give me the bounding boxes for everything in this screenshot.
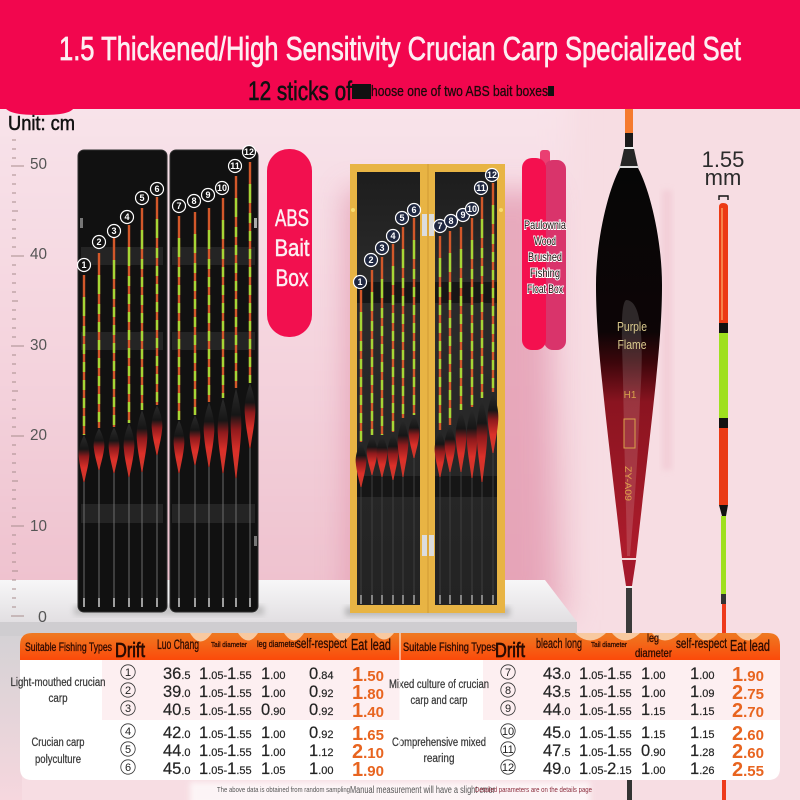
category labels: Mixed culture of crucian bbox=[389, 679, 489, 691]
row 2: 1.00 bbox=[261, 683, 285, 701]
row 1: 1 bbox=[125, 667, 131, 679]
category labels: polyculture bbox=[35, 754, 81, 766]
row 4: 4 bbox=[125, 726, 131, 738]
ruler: 30 bbox=[30, 337, 47, 354]
table header band: self-respect bbox=[676, 635, 727, 651]
row 10: 2.60 bbox=[732, 723, 764, 745]
float B4 bbox=[386, 230, 400, 604]
row 1 bbox=[121, 664, 384, 686]
float A10 bbox=[216, 182, 228, 607]
float A1 bbox=[78, 258, 90, 607]
wall shadow behind float bbox=[662, 190, 672, 470]
float A1: 1 bbox=[81, 260, 87, 270]
row 5: 1.00 bbox=[261, 742, 285, 760]
float B12: 12 bbox=[487, 170, 497, 180]
row 3: 0.92 bbox=[309, 701, 333, 719]
float A3: 3 bbox=[111, 226, 117, 236]
float label: Purple Flame bbox=[617, 319, 647, 352]
row 4: 42.0 bbox=[163, 724, 191, 742]
row 1: 36.5 bbox=[163, 665, 191, 683]
row 5: 44.0 bbox=[163, 742, 191, 760]
float A3 bbox=[108, 224, 120, 607]
row 7: 1.05-1.55 bbox=[579, 665, 632, 683]
float B7 bbox=[434, 220, 446, 604]
row 8: 1.00 bbox=[641, 683, 665, 701]
table header band: Suitable Fishing Types bbox=[25, 640, 112, 654]
row 2: 39.0 bbox=[163, 683, 191, 701]
float label: Purple Flame: Purple bbox=[617, 319, 647, 334]
row 10: 1.15 bbox=[641, 724, 665, 742]
float A2 bbox=[92, 236, 106, 607]
float A4: 4 bbox=[124, 212, 130, 222]
soft white band below table bbox=[190, 782, 590, 800]
row 7 bbox=[501, 664, 764, 686]
category labels: Comprehensive mixed bbox=[392, 737, 486, 749]
label pill: ABS Bait Box: Box bbox=[276, 265, 308, 292]
row 3 bbox=[121, 700, 384, 722]
table body bbox=[20, 660, 780, 780]
float B11: 11 bbox=[476, 183, 486, 193]
float A11: 11 bbox=[230, 161, 240, 171]
left strip below shelf bbox=[0, 636, 22, 800]
row 6: 45.0 bbox=[163, 760, 191, 778]
wall shadow behind wooden box bbox=[345, 190, 550, 610]
left wall gradient bbox=[0, 60, 570, 620]
large float close-up bbox=[596, 109, 662, 800]
category labels: Crucian carp bbox=[32, 737, 84, 749]
float B7: 7 bbox=[437, 221, 443, 231]
row 10: 1.15 bbox=[690, 724, 714, 742]
row 7: 43.0 bbox=[543, 665, 571, 683]
row 12: 2.55 bbox=[732, 759, 764, 781]
table header band: Luo Chang bbox=[157, 636, 199, 652]
float label: Purple Flame: Flame bbox=[618, 337, 646, 352]
tip diameter label bbox=[702, 147, 744, 200]
float marking: H1: H1 bbox=[624, 390, 637, 401]
table header band: self-respect bbox=[296, 635, 347, 651]
ruler: 50 bbox=[30, 156, 47, 173]
float B3 bbox=[376, 242, 388, 604]
ruler: 0 bbox=[38, 609, 47, 626]
row 1: 1.00 bbox=[261, 665, 285, 683]
row 3: 40.5 bbox=[163, 701, 191, 719]
float A8: 8 bbox=[191, 196, 197, 206]
row 11 bbox=[501, 741, 764, 763]
ruler: 10 bbox=[30, 518, 47, 535]
table header band: Suitable Fishing Types bbox=[403, 640, 496, 654]
row 7: 7 bbox=[505, 667, 511, 679]
row 4: 1.65 bbox=[352, 723, 384, 745]
unit label: Unit: cm bbox=[8, 113, 75, 135]
row 4: 1.00 bbox=[261, 724, 285, 742]
row 5 bbox=[121, 741, 384, 763]
float B10: 10 bbox=[467, 204, 477, 214]
row 9: 9 bbox=[505, 703, 511, 715]
float B2 bbox=[364, 254, 378, 604]
row 6: 1.05 bbox=[261, 760, 285, 778]
subtitle bbox=[248, 76, 554, 106]
float A6: 6 bbox=[154, 184, 160, 194]
row 3: 3 bbox=[125, 703, 131, 715]
panel: Paulownia wood box bbox=[345, 164, 510, 616]
row 1: 1.50 bbox=[352, 664, 384, 686]
float B10 bbox=[466, 202, 478, 604]
table header band: Tail diameter bbox=[211, 640, 247, 649]
row 12: 1.05-2.15 bbox=[579, 760, 632, 778]
float B5: 5 bbox=[399, 213, 405, 223]
float B6 bbox=[408, 204, 420, 604]
float A6 bbox=[150, 182, 164, 607]
row 8: 8 bbox=[505, 685, 511, 697]
float B8: 8 bbox=[448, 216, 454, 226]
table header band bbox=[20, 631, 780, 662]
float B2: 2 bbox=[368, 255, 374, 265]
float B9: 9 bbox=[460, 210, 466, 220]
label pill: Paulownia box: Float Box bbox=[527, 282, 563, 296]
row 10: 45.0 bbox=[543, 724, 571, 742]
ruler: 40 bbox=[30, 246, 47, 263]
float A8 bbox=[188, 194, 200, 607]
float A9: 9 bbox=[205, 190, 211, 200]
shelf front bbox=[0, 622, 577, 636]
row 8: 1.09 bbox=[690, 683, 714, 701]
ruler bbox=[11, 140, 47, 626]
row 7: 1.90 bbox=[732, 664, 764, 686]
footnote: Detailed parameters are on the details page bbox=[475, 785, 592, 794]
table header band: bleach long bbox=[536, 635, 582, 651]
float A7: 7 bbox=[176, 201, 182, 211]
float B1: 1 bbox=[357, 277, 363, 287]
row 3: 1.40 bbox=[352, 700, 384, 722]
float B6: 6 bbox=[411, 205, 417, 215]
float B11 bbox=[474, 182, 488, 604]
subtitle: 12 sticks of bbox=[248, 76, 352, 106]
float A5: 5 bbox=[139, 193, 145, 203]
row 11: 47.5 bbox=[543, 742, 571, 760]
row 8: 2.75 bbox=[732, 682, 764, 704]
row 12: 12 bbox=[502, 762, 514, 774]
specification table bbox=[10, 631, 780, 781]
row 6 bbox=[121, 759, 384, 781]
float A12: 12 bbox=[244, 147, 254, 157]
row 11: 2.60 bbox=[732, 741, 764, 763]
label pill: Paulownia box: Paulownia bbox=[524, 218, 566, 232]
row 9: 44.0 bbox=[543, 701, 571, 719]
label pill: Paulownia box: Brushed bbox=[528, 250, 562, 264]
panel: ABS bait box bbox=[74, 146, 264, 615]
float A9 bbox=[202, 188, 214, 607]
float B9 bbox=[456, 208, 470, 604]
row 6: 6 bbox=[125, 762, 131, 774]
table header band: Drift bbox=[115, 640, 145, 662]
row 2: 0.92 bbox=[309, 683, 333, 701]
subtitle: hoose one of two ABS bait boxes bbox=[371, 83, 548, 100]
float A4 bbox=[120, 210, 134, 607]
row 6: 1.00 bbox=[309, 760, 333, 778]
label pill: ABS Bait Box: ABS bbox=[275, 205, 309, 232]
row 5: 5 bbox=[125, 744, 131, 756]
row 11: 1.05-1.55 bbox=[579, 742, 632, 760]
footnote: Manual measurement will have a slight error bbox=[350, 785, 495, 796]
footnote: The above data is obtained from random sampling bbox=[217, 785, 350, 794]
table header band: Tail diameter bbox=[591, 640, 627, 649]
label pill: Paulownia box: Wood bbox=[534, 234, 556, 248]
category labels: carp bbox=[48, 693, 68, 705]
table header band: Drift bbox=[495, 640, 525, 662]
table header band: diameter bbox=[635, 646, 672, 660]
float B5 bbox=[396, 212, 408, 604]
row 9: 2.70 bbox=[732, 700, 764, 722]
label pill: ABS Bait Box: Bait bbox=[274, 235, 310, 262]
row 4 bbox=[121, 723, 384, 745]
tinted upper rows bbox=[102, 660, 400, 720]
row 11: 1.28 bbox=[690, 742, 714, 760]
float A12 bbox=[242, 146, 256, 607]
category labels: rearing bbox=[424, 753, 454, 765]
row 4: 1.05-1.55 bbox=[199, 724, 252, 742]
row 4: 0.92 bbox=[309, 724, 333, 742]
tinted upper rows right bbox=[483, 660, 780, 720]
row 11: 11 bbox=[502, 744, 514, 756]
float B3: 3 bbox=[379, 243, 385, 253]
shelf top bbox=[0, 580, 577, 622]
row 7: 1.00 bbox=[641, 665, 665, 683]
row 5: 2.10 bbox=[352, 741, 384, 763]
row 8: 1.05-1.55 bbox=[579, 683, 632, 701]
row 9: 1.15 bbox=[690, 701, 714, 719]
float marking: stamp bbox=[624, 419, 635, 448]
float B1 bbox=[354, 276, 366, 604]
row 12: 49.0 bbox=[543, 760, 571, 778]
table header band: leg diameter bbox=[257, 639, 297, 649]
footnote bbox=[217, 785, 592, 796]
row 10 bbox=[501, 723, 764, 745]
row 9 bbox=[501, 700, 764, 722]
float B4: 4 bbox=[390, 231, 396, 241]
row 12: 1.26 bbox=[690, 760, 714, 778]
float A2: 2 bbox=[96, 237, 102, 247]
float B8 bbox=[444, 214, 458, 604]
row 3: 1.05-1.55 bbox=[199, 701, 252, 719]
row 3: 0.90 bbox=[261, 701, 285, 719]
float A11 bbox=[228, 160, 242, 607]
float A5 bbox=[136, 192, 148, 607]
header banner bbox=[0, 0, 800, 115]
row 8 bbox=[501, 682, 764, 704]
row 9: 1.05-1.55 bbox=[579, 701, 632, 719]
row 9: 1.15 bbox=[641, 701, 665, 719]
row 6: 1.05-1.55 bbox=[199, 760, 252, 778]
float marking: model: ZY-A09 bbox=[622, 466, 633, 501]
slim float tip close-up bbox=[719, 203, 728, 800]
category labels bbox=[10, 677, 489, 766]
row 10: 10 bbox=[502, 726, 514, 738]
column divider bbox=[399, 633, 401, 780]
table header band: Eat lead bbox=[730, 638, 770, 655]
row 12: 1.00 bbox=[641, 760, 665, 778]
row 2: 1.05-1.55 bbox=[199, 683, 252, 701]
tip diameter label: mm bbox=[705, 165, 741, 190]
row 11: 0.90 bbox=[641, 742, 665, 760]
row 7: 1.00 bbox=[690, 665, 714, 683]
float A7 bbox=[172, 200, 186, 607]
float B12 bbox=[486, 168, 498, 604]
row 6: 1.90 bbox=[352, 759, 384, 781]
row 8: 43.5 bbox=[543, 683, 571, 701]
row 2: 2 bbox=[125, 685, 131, 697]
tip diameter label: 1.55 bbox=[702, 147, 744, 172]
ruler: 20 bbox=[30, 427, 47, 444]
row 5: 1.12 bbox=[309, 742, 333, 760]
row 1: 1.05-1.55 bbox=[199, 665, 252, 683]
table header band: leg bbox=[647, 631, 659, 645]
label pill: Paulownia box bbox=[522, 150, 566, 350]
float A10: 10 bbox=[217, 183, 227, 193]
row 2: 1.80 bbox=[352, 682, 384, 704]
row 12 bbox=[501, 759, 764, 781]
table header band: Eat lead bbox=[351, 637, 391, 654]
row 10: 1.05-1.55 bbox=[579, 724, 632, 742]
label pill: ABS Bait Box bbox=[267, 149, 312, 337]
label pill: Paulownia box: Fishing bbox=[530, 266, 560, 280]
row 2 bbox=[121, 682, 384, 704]
category labels: Light-mouthed crucian bbox=[10, 677, 106, 689]
row 1: 0.84 bbox=[309, 665, 333, 683]
row 5: 1.05-1.55 bbox=[199, 742, 252, 760]
category labels: carp and carp bbox=[410, 695, 468, 707]
